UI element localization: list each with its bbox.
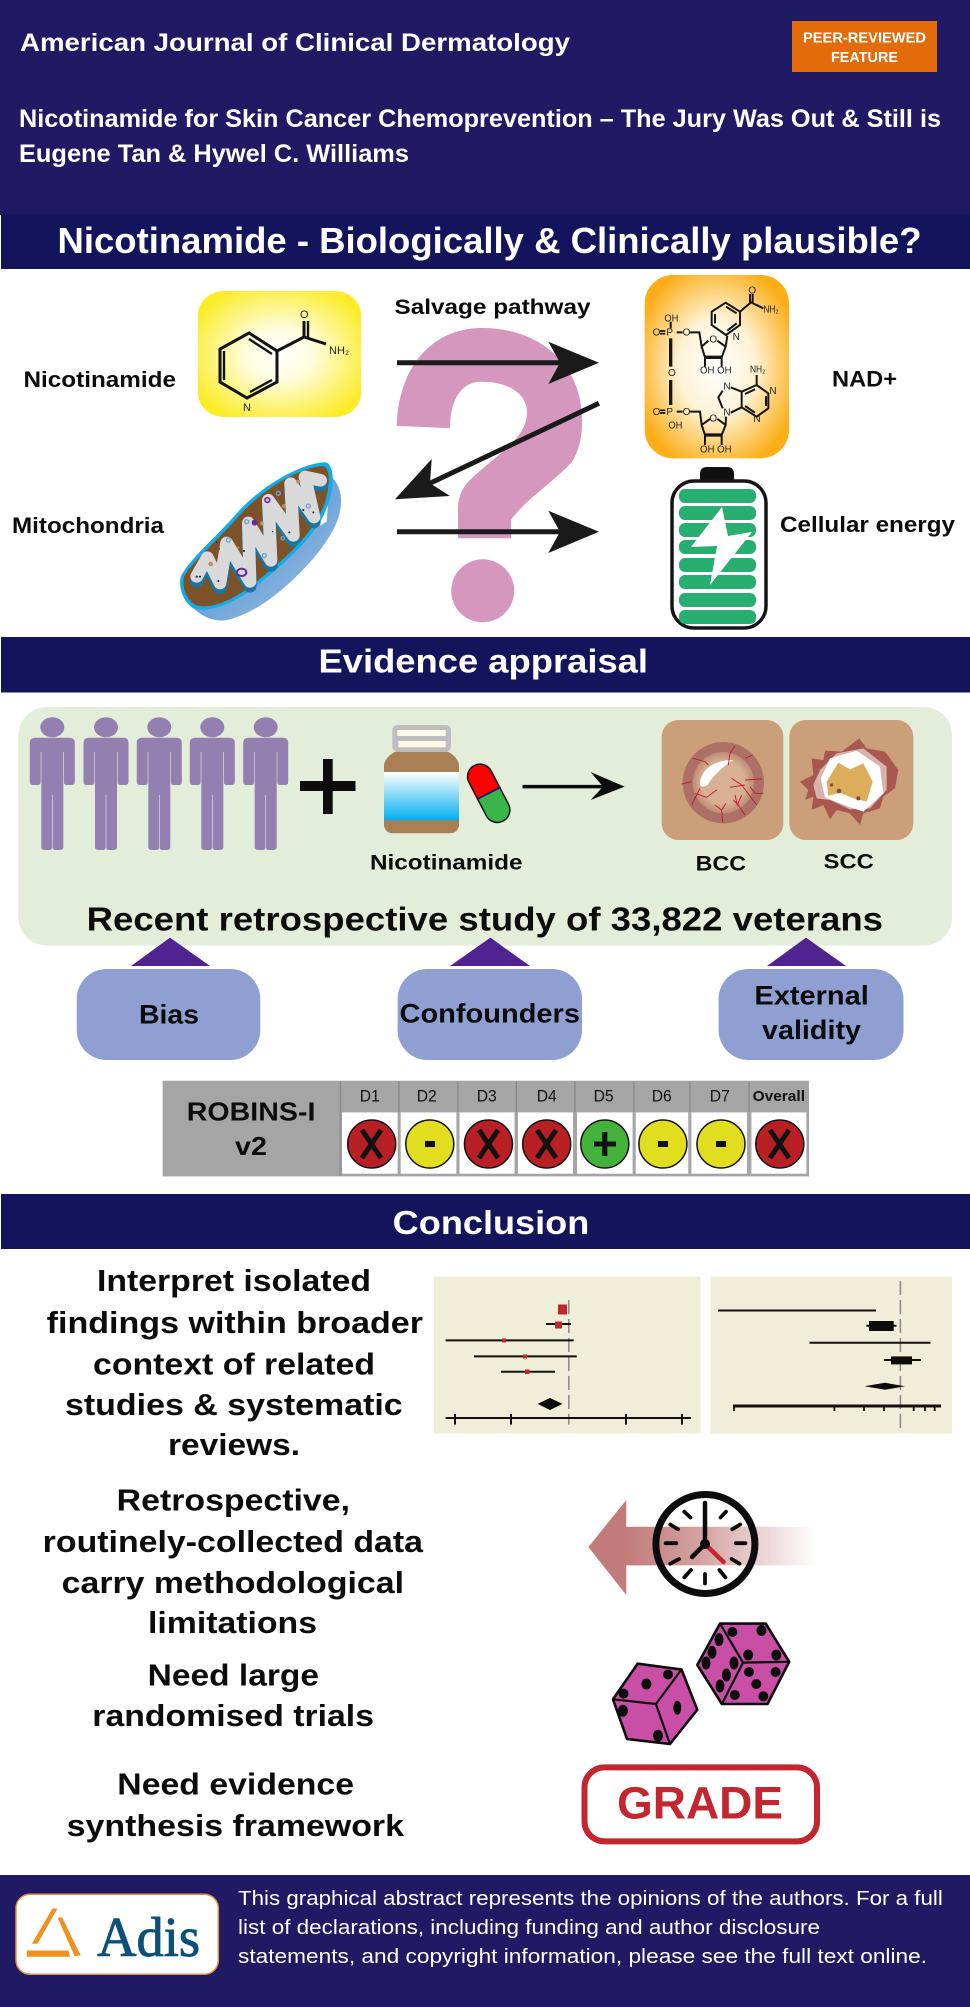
text: need large trials (92, 1658, 374, 1733)
callout: external validity: validity (762, 1015, 861, 1045)
label: nicotinamide: Nicotinamide (370, 852, 522, 875)
study description: Recent retrospective study of 33,822 veterans (87, 900, 883, 938)
chart: forest plot left (434, 1276, 701, 1434)
column headings: D6 (652, 1086, 672, 1105)
peer-reviewed badge: PEER-REVIEWED (803, 30, 926, 46)
icon: NAD+ molecule (645, 275, 789, 458)
disclaimer text: statements, and copyright information, please see the full text online. (238, 1945, 927, 1968)
icon: capsule (463, 760, 514, 827)
callout: bias (77, 938, 260, 1060)
disclaimer text: list of declarations, including funding and author disclosure (238, 1916, 820, 1939)
arrow: treatment to outcome (522, 772, 625, 800)
icon: plus sign (300, 759, 356, 814)
label: nicotinamide: Nicotinamide (24, 367, 176, 392)
section heading: plausibility (1, 214, 970, 269)
arrow: mitochondria to cellular energy (397, 511, 599, 553)
text: need evidence synthesis (67, 1766, 405, 1843)
label: ROBINS-I v2: v2 (235, 1131, 267, 1161)
icon: NAD+ molecule: N (723, 381, 731, 392)
text: interpret findings: reviews. (168, 1427, 300, 1462)
icon: NAD+ molecule: NH₂ (763, 304, 779, 315)
logo: Adis: Adis (97, 1907, 200, 1969)
column headings: D2 (417, 1086, 437, 1105)
column headings: D5 (594, 1086, 614, 1105)
text: retrospective data limitations: limitations (148, 1605, 317, 1640)
icon: NAD+ molecule: N (753, 414, 761, 425)
icon: NAD+ molecule: O (668, 368, 676, 379)
rating: D6 some concerns (639, 1120, 687, 1168)
peer-reviewed badge (792, 21, 937, 72)
callout: external validity (719, 938, 904, 1060)
icon: mitochondrion (180, 462, 341, 621)
column headings (340, 1081, 805, 1176)
callout: confounders (398, 938, 582, 1060)
rating cells (342, 1112, 806, 1174)
rating: D5 low risk (581, 1120, 629, 1168)
icon: GRADE stamp: GRADE (617, 1778, 783, 1829)
panel: retrospective study (18, 707, 952, 946)
text: retrospective data limitations (43, 1483, 424, 1640)
column headings: Overall (753, 1088, 805, 1105)
icon: nicotinamide molecule (198, 291, 361, 417)
callout: bias: Bias (139, 999, 199, 1029)
icon: NAD+ molecule: P (666, 407, 673, 418)
rating: D2 some concerns (406, 1120, 454, 1168)
text: interpret findings: studies & systematic (65, 1387, 403, 1422)
icon: NAD+ molecule: O (709, 335, 717, 346)
disclaimer text: This graphical abstract represents the opinions of the authors. For a full (238, 1887, 943, 1910)
text: need large trials: randomised trials (92, 1698, 374, 1733)
icon: NAD+ molecule: OH (668, 421, 682, 432)
icon: basal cell carcinoma (662, 720, 783, 840)
icon: group of people (30, 717, 288, 850)
icon: left die (613, 1664, 697, 1744)
arrow: NAD+ to mitochondria (395, 403, 599, 499)
section heading: plausibility: Nicotinamide - Biologically & Clinically plausible? (58, 220, 922, 261)
icon: NAD+ molecule: O (683, 328, 691, 339)
icon: NAD+ molecule: N (769, 386, 777, 397)
chart: forest plot right (710, 1276, 952, 1434)
label: ROBINS-I v2 (187, 1096, 315, 1161)
label: NAD+: NAD+ (832, 366, 897, 392)
rating: D4 high risk (523, 1120, 571, 1168)
column headings: D3 (477, 1086, 497, 1105)
icon: NAD+ molecule: O (709, 414, 717, 425)
text: interpret findings: context of related (93, 1347, 375, 1382)
icon: NAD+ molecule: O (683, 407, 691, 418)
callout: confounders: Confounders (400, 999, 580, 1029)
rating: D3 high risk (464, 1120, 512, 1168)
disclaimer text (238, 1887, 943, 1968)
arrow: nicotinamide to NAD+ (397, 342, 599, 384)
column headings: D7 (710, 1086, 730, 1105)
icon: nicotinamide molecule: NH₂ (329, 345, 349, 357)
label: ROBINS-I v2: ROBINS-I (187, 1096, 315, 1126)
section heading: conclusion (1, 1194, 970, 1249)
label: cellular energy: Cellular energy (780, 512, 956, 537)
icon: dice (613, 1624, 789, 1744)
icon: NAD+ molecule: O (653, 407, 661, 418)
article title: Nicotinamide for Skin Cancer Chemoprevention – The Jury Was Out & Still is (19, 105, 941, 133)
text: need large trials: Need large (148, 1658, 319, 1692)
icon: GRADE stamp (584, 1767, 817, 1841)
icon: NAD+ molecule: N (733, 332, 740, 343)
icon: nicotinamide molecule: N (243, 402, 251, 414)
icon: question mark (397, 328, 582, 622)
section heading: evidence appraisal (1, 637, 970, 692)
text: retrospective data limitations: carry methodological (62, 1565, 404, 1600)
icon: NAD+ molecule: OH (664, 313, 678, 324)
column headings: D1 (360, 1086, 380, 1105)
text: interpret findings (47, 1263, 423, 1462)
authors: Eugene Tan & Hywel C. Williams (19, 140, 409, 168)
logo: Adis (16, 1894, 218, 1974)
text: retrospective data limitations: routinely-collected data (43, 1524, 424, 1559)
label: BCC: BCC (696, 852, 746, 875)
peer-reviewed badge: FEATURE (831, 49, 898, 66)
text: interpret findings: findings within broader (47, 1305, 423, 1340)
header banner (0, 0, 970, 215)
journal name: American Journal of Clinical Dermatology (20, 29, 570, 57)
rating: D1 high risk (348, 1120, 396, 1168)
text: interpret findings: Interpret isolated (97, 1263, 371, 1298)
section heading: evidence appraisal: Evidence appraisal (318, 643, 648, 680)
text: need evidence synthesis: synthesis framework (67, 1808, 405, 1843)
section heading: conclusion: Conclusion (393, 1204, 589, 1241)
label: mitochondria: Mitochondria (12, 513, 165, 538)
label: SCC: SCC (824, 850, 874, 873)
footer (0, 1875, 970, 2007)
icon: nicotinamide molecule: O (300, 309, 309, 321)
icon: NAD+ molecule: NH₂ (750, 364, 765, 375)
icon: NAD+ molecule: P (666, 328, 673, 339)
icon: squamous cell carcinoma (789, 720, 913, 840)
icon: NAD+ molecule: OH OH (700, 445, 732, 456)
icon: NAD+ molecule: O (653, 328, 661, 339)
table: ROBINS-I risk of bias (163, 1081, 809, 1176)
rating: D7 some concerns (697, 1120, 745, 1168)
icon: nicotinamide bottle (384, 725, 459, 833)
rating: overall high risk (756, 1120, 804, 1168)
pathway diagram (12, 275, 956, 628)
icon: NAD+ molecule: OH OH (700, 366, 732, 377)
icon: NAD+ molecule: N (723, 407, 731, 418)
icon: battery (672, 467, 766, 628)
text: retrospective data limitations: Retrospective, (117, 1483, 350, 1518)
label: salvage pathway: Salvage pathway (394, 296, 591, 319)
callout: external validity: External (754, 980, 869, 1010)
icon: NAD+ molecule: O (748, 285, 756, 296)
column headings: D4 (537, 1086, 557, 1105)
icon: clock with backward arrow (588, 1494, 816, 1595)
icon: right die (697, 1624, 789, 1704)
text: need evidence synthesis: Need evidence (117, 1766, 354, 1802)
